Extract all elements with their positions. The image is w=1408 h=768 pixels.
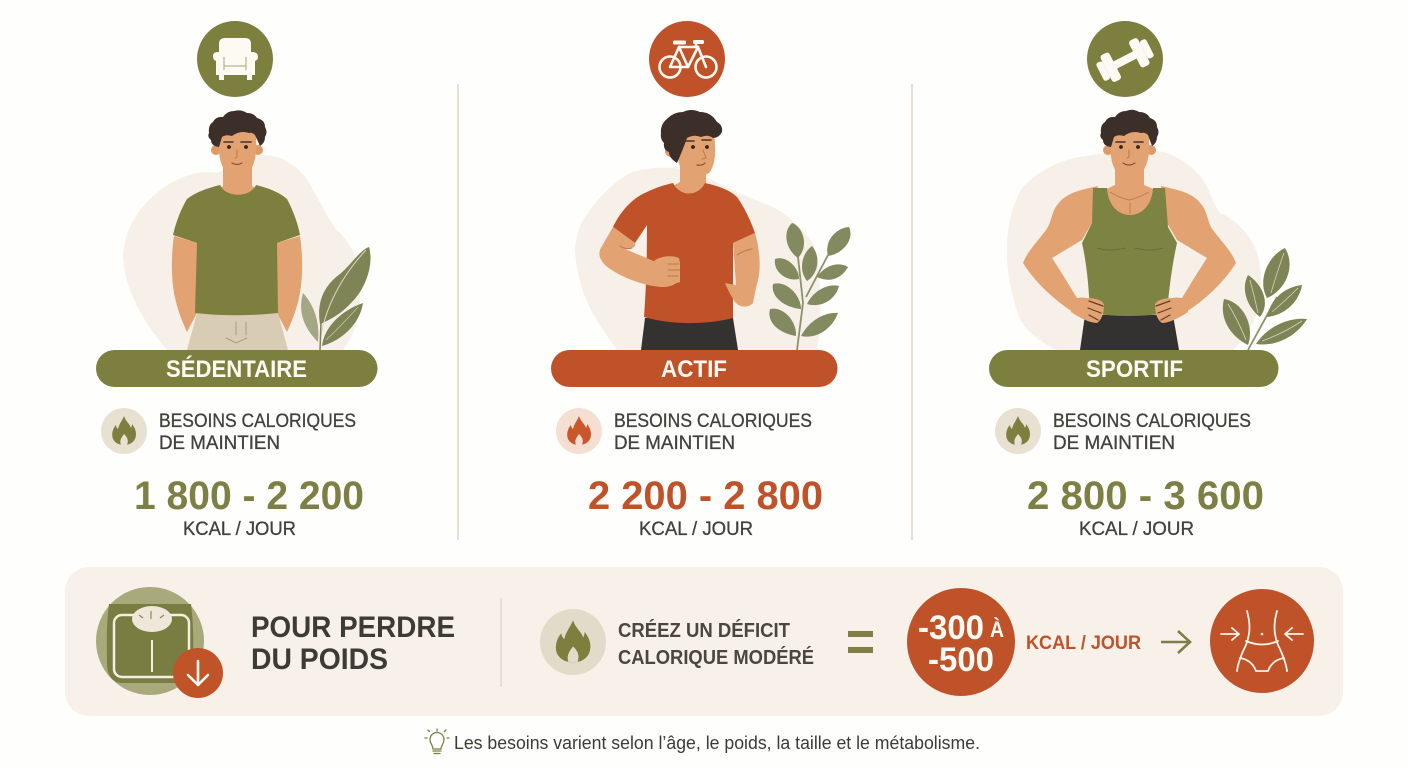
arrow: [1161, 631, 1190, 653]
panel: sportif: [989, 21, 1307, 540]
unit: KCAL / JOUR: [1079, 518, 1194, 540]
unit: KCAL / JOUR: [183, 518, 296, 540]
text: besoins: BESOINS CALORIQUES: [614, 411, 812, 432]
text: déficit: CALORIQUE MODÉRÉ: [618, 646, 814, 669]
panel: sédentaire: [96, 21, 378, 540]
callout: deficit value: [907, 588, 1015, 696]
heading: [251, 611, 455, 676]
heading: DU POIDS: [251, 643, 388, 676]
unit: KCAL / JOUR: [639, 518, 753, 540]
label pill: ACTIF: [661, 356, 727, 383]
number: 2 800 - 3 600: [1027, 474, 1264, 518]
plant: [1223, 248, 1307, 350]
text: déficit: [618, 619, 814, 669]
background blob: [123, 155, 360, 350]
number: 1 800 - 2 200: [134, 474, 364, 518]
text: besoins: [1053, 411, 1251, 454]
panel: pour perdre du poids: [65, 567, 1343, 716]
text: besoins: DE MAINTIEN: [614, 433, 735, 454]
equals sign: [848, 631, 873, 653]
plant: [769, 223, 851, 350]
icon: scale: [96, 587, 223, 698]
label pill: SPORTIF: [1086, 356, 1183, 383]
text: besoins: [159, 411, 356, 454]
panel: actif: [551, 21, 851, 540]
icon: light bulb: [425, 729, 449, 754]
icon: flame: [995, 408, 1041, 454]
text: besoins: DE MAINTIEN: [1053, 433, 1175, 454]
background blob: [1007, 150, 1261, 350]
icon: armchair: [197, 21, 273, 97]
text: besoins: [614, 411, 812, 454]
callout: deficit value: -300: [918, 609, 984, 647]
text: besoins: DE MAINTIEN: [159, 433, 280, 454]
plant: [301, 247, 370, 350]
icon: flame: [556, 408, 602, 454]
callout: deficit value: -500: [928, 641, 994, 679]
background blob: [575, 168, 820, 350]
callout: deficit value: À: [990, 617, 1004, 642]
icon: flame: [101, 408, 147, 454]
label pill: [96, 350, 378, 387]
heading: POUR PERDRE: [251, 611, 455, 644]
footer note: Les besoins varient selon l’âge, le poids, la taille et le métabolisme.: [454, 733, 980, 753]
text: besoins: BESOINS CALORIQUES: [159, 411, 356, 432]
person: sportif: [1023, 110, 1236, 350]
number: 2 200 - 2 800: [588, 474, 823, 518]
icon: dumbbell: [1087, 21, 1163, 97]
icon: flame: [540, 609, 606, 675]
unit: KCAL / JOUR: [1026, 632, 1141, 654]
icon: waist: [1210, 589, 1314, 693]
label pill: [551, 350, 838, 387]
label pill: SÉDENTAIRE: [166, 355, 307, 383]
text: besoins: BESOINS CALORIQUES: [1053, 411, 1251, 432]
text: déficit: CRÉEZ UN DÉFICIT: [618, 619, 790, 642]
icon: bicycle: [649, 21, 725, 97]
person: sédentaire: [172, 110, 302, 350]
person: actif: [599, 110, 760, 350]
label pill: [989, 350, 1278, 387]
